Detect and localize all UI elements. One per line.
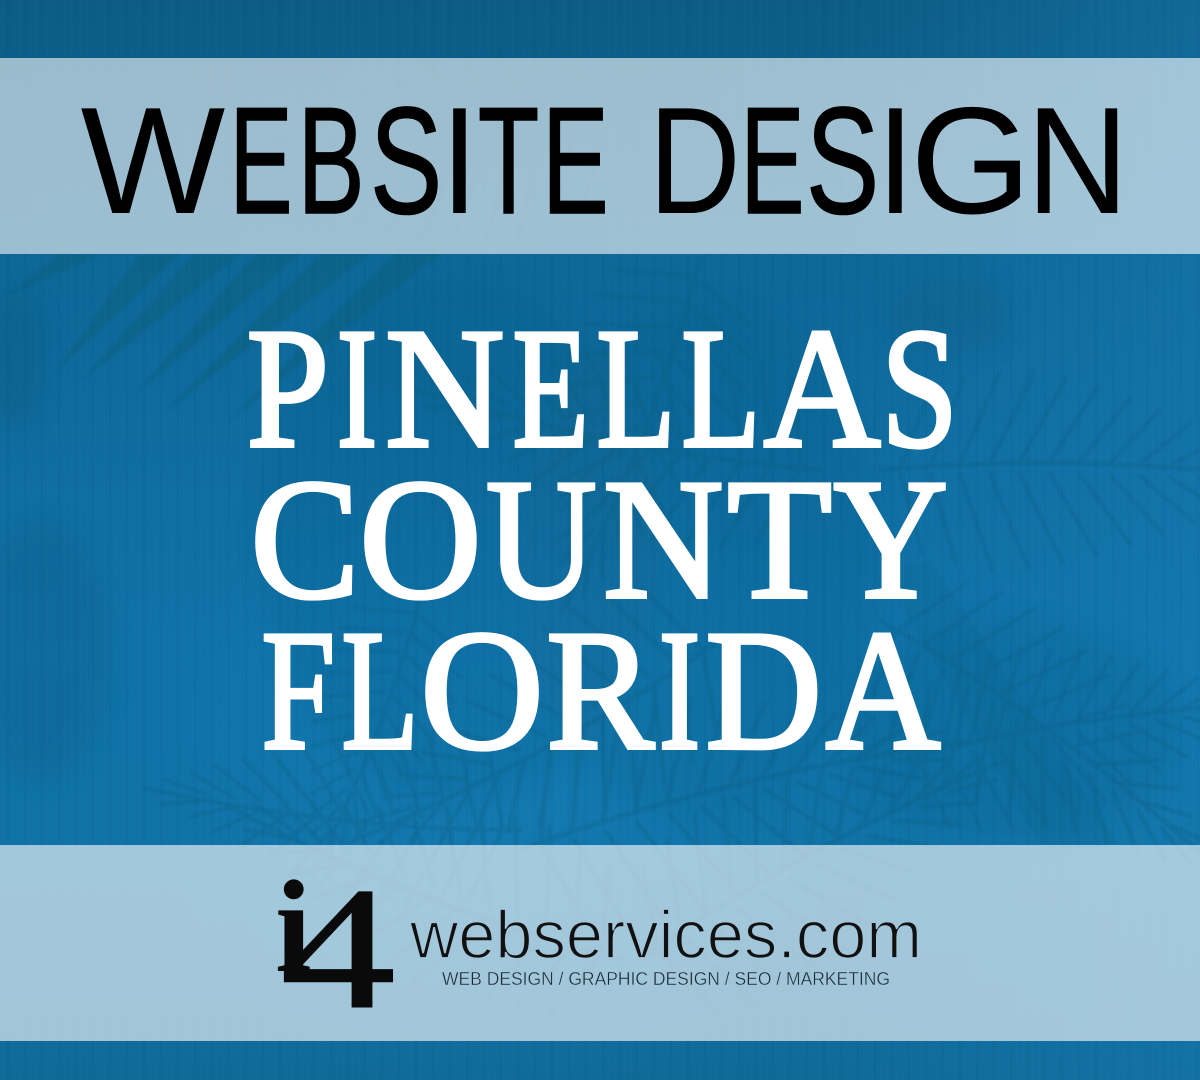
heading: location: C [250, 445, 360, 635]
logo tagline: WEB DESIGN / GRAPHIC DESIGN / SEO / MARKETING [442, 969, 890, 989]
heading: location: A [764, 294, 881, 484]
heading: website design: W [81, 76, 225, 246]
heading: location: R [546, 596, 654, 786]
heading: location: N [385, 294, 504, 484]
heading: location: U [486, 445, 597, 635]
heading: location: L [596, 294, 676, 484]
heading: website design: T [478, 76, 539, 246]
heading: website design: E [542, 76, 609, 246]
heading: website design: S [370, 76, 442, 246]
logo: i4 webservices.com [275, 851, 922, 1045]
bottom banner band [0, 845, 1200, 1041]
top band tint [0, 58, 1200, 254]
logo mark: i4: i [275, 853, 312, 1000]
background: soft darker foliage masses [0, 275, 1180, 840]
heading: location: I [659, 596, 700, 786]
heading: website design: N [1026, 76, 1129, 246]
heading: location: N [603, 445, 724, 635]
heading: location: I [337, 294, 377, 484]
heading: location: A [826, 596, 940, 786]
heading: website design: S [806, 76, 879, 246]
heading: location: L [681, 294, 761, 484]
heading: location: S [881, 294, 958, 484]
heading: website design: E [740, 76, 804, 246]
heading: website design: D [649, 76, 741, 246]
heading: website design: B [298, 76, 365, 246]
background: lower right trunk stripe [880, 560, 1120, 845]
heading: location: D [705, 596, 822, 786]
top banner band [0, 58, 1200, 254]
heading: location: E [512, 294, 589, 484]
background: drooping leaves top left [8, 254, 440, 420]
heading: location: P [247, 294, 329, 484]
heading: location: Y [834, 445, 948, 635]
heading: website design: G [910, 76, 1032, 246]
heading: website design: E [230, 76, 292, 246]
heading: location [247, 294, 958, 786]
logo wordmark: webservices.com [409, 897, 922, 973]
heading: location: F [261, 596, 335, 786]
heading: website design: I [441, 76, 478, 246]
logo mark: i4: 4 [280, 851, 396, 1045]
heading: location: O [420, 596, 544, 786]
heading: location: O [359, 445, 482, 635]
heading: location: L [342, 596, 419, 786]
heading: website design: I [877, 76, 914, 246]
heading: location: T [727, 445, 832, 635]
